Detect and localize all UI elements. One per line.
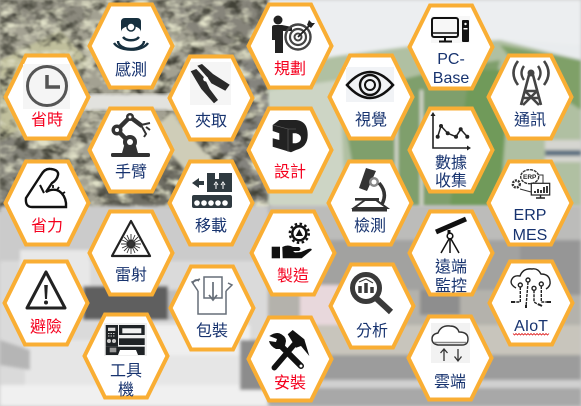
icon: conveyor with box	[192, 173, 232, 208]
label line 2: 機	[118, 381, 134, 399]
icon: machine tool	[104, 323, 147, 356]
icon: line chart	[430, 112, 471, 150]
icon: eye	[346, 67, 394, 102]
label: 製造	[277, 267, 309, 285]
label: 工具	[110, 363, 142, 380]
photo: factory line top left	[0, 0, 270, 212]
label: 包裝	[196, 322, 228, 340]
hexagon: 省力	[6, 162, 88, 244]
icon: cloud sync	[431, 323, 470, 363]
icon: desktop computer	[431, 16, 470, 43]
label: AIoT	[514, 318, 548, 335]
label: 通訊	[514, 111, 546, 129]
hexagon: 分析	[330, 264, 414, 348]
hexagon: 省時	[6, 56, 88, 138]
icon: flexed arm	[26, 169, 66, 207]
label: 視覺	[355, 111, 387, 129]
icon: person with target	[272, 16, 315, 53]
label: 數據	[435, 154, 467, 172]
hexagon: 數據收集	[410, 108, 492, 192]
hexagon: 避險	[4, 262, 88, 344]
label: 夾取	[195, 112, 227, 130]
label: 檢測	[354, 217, 386, 235]
hexagon: 遠端監控	[410, 212, 492, 295]
label: 雷射	[115, 266, 147, 284]
icon: 3D block	[273, 120, 308, 152]
photo: machine bottom right	[268, 206, 581, 406]
label: PC-	[437, 51, 465, 68]
icon: packing box	[192, 277, 232, 314]
hexagon: 雷射	[90, 212, 172, 294]
icon: AI cloud circuit	[511, 269, 551, 308]
hexagon: ERP MES	[488, 162, 572, 244]
label: 規劃	[274, 60, 306, 78]
icon: clock	[23, 64, 70, 109]
icon: radio tower	[514, 61, 548, 105]
hexagon: PC-Base	[410, 6, 492, 88]
label: 遠端	[435, 258, 467, 276]
icon: warning triangle	[27, 272, 65, 308]
label: 安裝	[274, 374, 306, 392]
label: 省時	[31, 111, 63, 129]
hexagon: 雲端	[408, 316, 492, 400]
icon: laser warning	[112, 221, 150, 256]
hexagon: 移載	[170, 162, 252, 244]
hexagon: 感測	[90, 4, 172, 88]
icon: sensor	[114, 18, 148, 50]
hexagon: 夾取	[170, 56, 252, 140]
label: 雲端	[434, 373, 466, 391]
icon: gear in hand	[272, 224, 312, 258]
label: 移載	[195, 217, 227, 235]
label line 2: MES	[513, 227, 547, 244]
icon: magnifier with chart	[352, 274, 391, 312]
label: ERP	[514, 207, 546, 224]
label: 省力	[31, 217, 63, 235]
icon: microscope	[352, 168, 387, 212]
hexagon: 檢測	[328, 162, 412, 244]
hexagon: 手臂	[90, 108, 172, 192]
icon: telescope	[436, 219, 466, 253]
hexagon: 包裝	[170, 266, 254, 350]
hexagon: AIoT	[490, 262, 572, 344]
label: 分析	[356, 322, 388, 340]
hexagon: 視覺	[330, 56, 412, 138]
hexagon: 設計	[248, 108, 332, 192]
hexagon: 製造	[252, 212, 334, 294]
label line 2: 監控	[435, 277, 467, 295]
icon: robot arm	[111, 113, 150, 157]
label: 設計	[274, 163, 306, 181]
icon: ERP gears and chart: ERP	[523, 174, 537, 181]
label: 避險	[30, 318, 62, 336]
photo: greenhouse top right	[268, 0, 581, 206]
photo: clean room bottom left	[0, 206, 270, 406]
hexagon: 安裝	[248, 318, 332, 400]
label line 2: 收集	[435, 172, 467, 190]
label line 2: Base	[433, 70, 469, 87]
spell-check underline	[513, 334, 549, 335]
label: 感測	[115, 60, 147, 79]
label: 手臂	[115, 163, 147, 181]
hexagon: 通訊	[488, 56, 572, 138]
hexagon: 工具機	[84, 314, 168, 399]
hexagon: 規劃	[248, 4, 332, 88]
icon: clamp	[190, 62, 231, 105]
icon: crossed tools	[269, 330, 309, 368]
